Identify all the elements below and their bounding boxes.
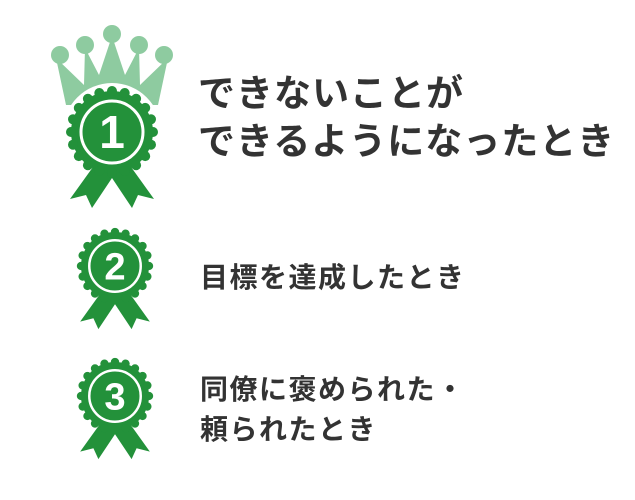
text 3 xyxy=(200,374,466,445)
text 3: 同僚に褒められた・ xyxy=(200,374,466,405)
badge 2: 2 xyxy=(104,245,126,288)
badge 2 xyxy=(77,228,153,329)
badge 1 xyxy=(63,83,161,208)
text 1: できるようになったとき xyxy=(198,121,615,162)
badge 1: 1 xyxy=(99,106,125,158)
crown xyxy=(51,25,173,105)
badge 3: 3 xyxy=(104,375,126,418)
text 1: できないことが xyxy=(198,73,464,114)
badge 3 xyxy=(77,358,153,459)
text 1 xyxy=(198,73,615,162)
text 2: 目標を達成したとき xyxy=(200,262,466,293)
text 3: 頼られたとき xyxy=(200,414,377,445)
